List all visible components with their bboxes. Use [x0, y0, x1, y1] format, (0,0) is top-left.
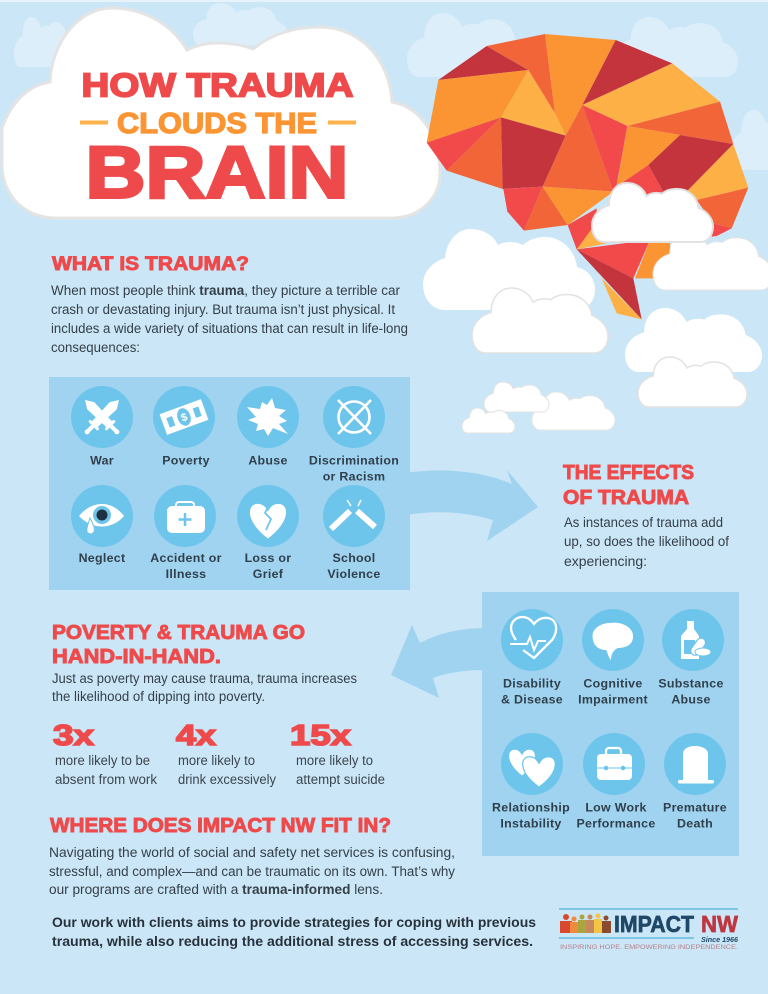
arrow: to poverty: [391, 625, 486, 698]
accident or illness: Accident or: [150, 551, 222, 565]
logo: impact nw: NW: [701, 911, 738, 937]
heading: the effects of trauma: OF TRAUMA: [563, 487, 689, 509]
relationship instability: [492, 733, 570, 830]
heading: poverty and trauma: [52, 622, 305, 668]
stat: 3x: more likely to be: [55, 753, 150, 768]
text: where: Navigating the world of social and safety net services is confusing,: [49, 845, 455, 860]
abuse: Abuse: [248, 454, 288, 468]
brain illustration: [427, 34, 748, 319]
stat: 4x: drink excessively: [178, 772, 276, 787]
abuse: [237, 386, 299, 468]
loss or grief: Loss or: [245, 551, 291, 565]
text: where: [49, 845, 455, 897]
accident or illness: Illness: [166, 567, 206, 581]
accident or illness: [150, 485, 222, 581]
title line 2: CLOUDS THE: [117, 108, 317, 140]
substance abuse: Abuse: [671, 692, 711, 706]
premature death: Death: [677, 816, 713, 830]
text: poverty: Just as poverty may cause trauma, trauma increases: [52, 671, 357, 686]
text: where: stressful, and complex—and can be traumatic on its own. That’s why: [49, 864, 455, 879]
logo people: [560, 914, 611, 933]
text: where: our programs are crafted with a trauma-informed lens.: [49, 882, 383, 897]
school violence: School: [332, 551, 376, 565]
discrimination: Discrimination: [309, 454, 399, 468]
stat: 15x: attempt suicide: [296, 772, 385, 787]
loss or grief: Grief: [253, 567, 284, 581]
logo: impact nw: IMPACT: [614, 911, 694, 937]
cognitive impairment: [578, 609, 648, 706]
heading: poverty and trauma: POVERTY & TRAUMA GO: [52, 622, 305, 644]
text: closing statement: [52, 915, 536, 949]
arrow: to effects: [405, 470, 538, 541]
panel: effects of trauma: [482, 592, 739, 856]
relationship instability: Instability: [500, 816, 562, 830]
title cloud: [2, 8, 440, 218]
cognitive impairment: Cognitive: [583, 676, 643, 690]
logo: impact nw: Since 1966: [701, 935, 739, 944]
text: closing statement: Our work with clients aims to provide strategies for coping with previous: [52, 915, 536, 930]
low work performance: Low Work: [585, 800, 647, 814]
text: what is trauma: includes a wide variety of situations that can result in life-long: [51, 321, 408, 336]
premature death: Premature: [663, 800, 727, 814]
war: War: [90, 454, 114, 468]
discrimination: or Racism: [323, 470, 385, 484]
cognitive impairment: Impairment: [578, 692, 648, 706]
premature death: [663, 733, 727, 830]
logo: impact nw: [559, 908, 739, 951]
neglect: [71, 485, 133, 565]
text: what is trauma: When most people think trauma, they picture a terrible car: [51, 283, 401, 298]
title line 2: [80, 108, 356, 140]
loss or grief: [237, 485, 299, 581]
text: poverty: [52, 671, 357, 704]
substance abuse: [658, 609, 724, 706]
text: effects: experiencing:: [564, 554, 647, 569]
discrimination: [309, 386, 399, 484]
stat: 15x: more likely to: [296, 753, 373, 768]
title line 1: HOW TRAUMA: [82, 66, 354, 104]
poverty: [153, 386, 215, 468]
disability and disease: Disability: [503, 676, 561, 690]
stat: 4x: [176, 720, 276, 787]
stat: 3x: absent from work: [55, 772, 157, 787]
school violence: Violence: [327, 567, 381, 581]
text: what is trauma: crash or devastating injury. But trauma isn’t just physical. It: [51, 302, 395, 317]
logo: impact nw: INSPIRING HOPE. EMPOWERING INDEPENDENCE.: [560, 944, 738, 951]
title: [80, 66, 356, 214]
relationship instability: Relationship: [492, 800, 570, 814]
disability and disease: & Disease: [501, 692, 563, 706]
stat: 15x: [290, 720, 385, 787]
stat: 3x: [53, 720, 157, 787]
text: effects: up, so does the likelihood of: [564, 534, 729, 549]
heading: the effects of trauma: THE EFFECTS: [563, 462, 694, 484]
neglect: Neglect: [79, 551, 125, 565]
stat: 15x: 15x: [290, 720, 351, 752]
heading: what is trauma: WHAT IS TRAUMA?: [52, 253, 249, 275]
low work performance: [576, 733, 656, 830]
text: closing statement: trauma, while also reducing the additional stress of accessing services.: [52, 934, 533, 949]
poverty: Poverty: [162, 454, 210, 468]
disability and disease: [501, 609, 563, 706]
low work performance: Performance: [576, 816, 656, 830]
heading: the effects of trauma: [563, 462, 694, 509]
poverty: $: [179, 411, 189, 425]
text: what is trauma: consequences:: [51, 340, 140, 355]
text: poverty: the likelihood of dipping into poverty.: [52, 689, 265, 704]
background clouds: [14, 3, 768, 170]
stat: 4x: more likely to: [178, 753, 255, 768]
stat: 4x: 4x: [176, 720, 216, 752]
school violence: [323, 485, 385, 581]
heading: where does impact nw fit in: WHERE DOES IMPACT NW FIT IN?: [50, 815, 391, 837]
white clouds around brain: [423, 183, 768, 433]
war: [71, 386, 133, 468]
text: what is trauma: [51, 283, 408, 355]
title line 3: BRAIN: [86, 132, 348, 214]
substance abuse: Substance: [658, 676, 724, 690]
panel: causes of trauma: [49, 377, 410, 590]
heading: poverty and trauma: HAND-IN-HAND.: [52, 646, 221, 668]
text: effects: [564, 515, 729, 569]
text: effects: As instances of trauma add: [564, 515, 723, 530]
stat: 3x: 3x: [53, 720, 94, 752]
